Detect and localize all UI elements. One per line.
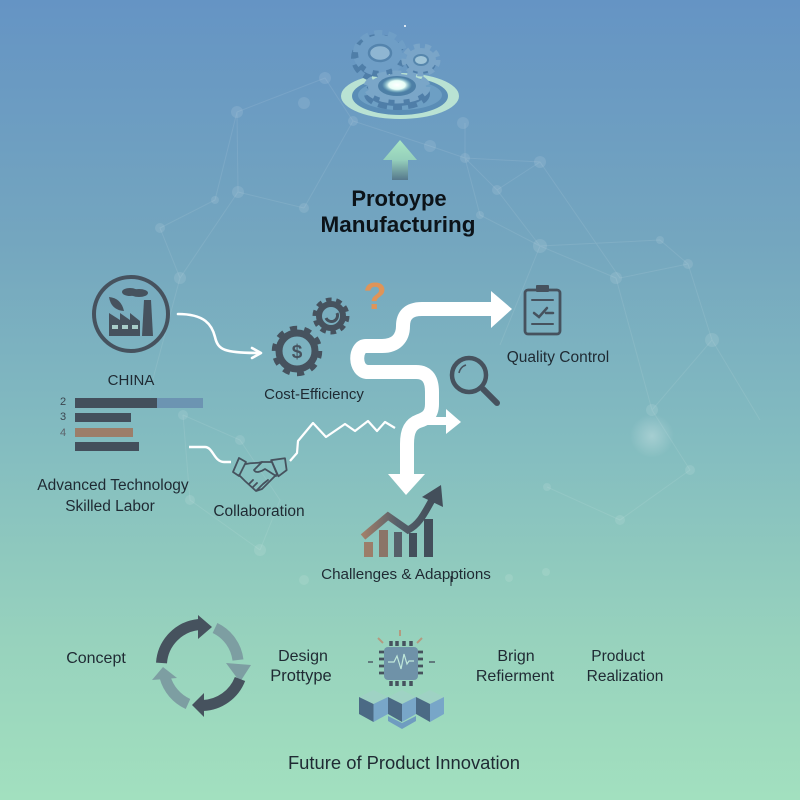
arrow: up: [383, 140, 417, 180]
bar chart: [60, 396, 203, 451]
title: Protoype: [351, 186, 447, 211]
text: advanced technology, skilled labor: Skilled Labor: [65, 498, 155, 515]
connector: bars to handshake: [189, 447, 231, 462]
icon: handshake: [233, 458, 287, 491]
arrow: factory to cost-efficiency: [178, 314, 261, 358]
icon: china factory: [94, 277, 168, 351]
icon: magnifier: [452, 358, 497, 403]
icon: dollar gear: $: [292, 342, 303, 363]
title: Manufacturing: [320, 212, 476, 237]
text: design prototype: Design: [278, 648, 328, 665]
text: design prototype: [270, 648, 332, 685]
main white flow arrows: [357, 291, 512, 495]
bar chart: 4: [60, 427, 66, 439]
icon: clipboard: [525, 285, 560, 334]
text: product realization: Realization: [587, 668, 663, 685]
title: [320, 186, 476, 237]
label: cost-efficiency: Cost-Efficiency: [264, 386, 364, 403]
icon: growth chart: [363, 485, 443, 557]
connector: handshake to flow: [290, 421, 395, 461]
text: product realization: [587, 648, 663, 685]
label: china: CHINA: [108, 372, 154, 389]
icon: small gear: [315, 300, 347, 332]
text: bring refinement: Refierment: [476, 668, 555, 685]
icon: cycle arrows: [152, 615, 251, 717]
label: challenges and adaptions: Challenges & Adapptions: [321, 566, 491, 583]
text: advanced technology, skilled labor: [37, 477, 189, 515]
footer title: Future of Product Innovation: [288, 752, 520, 773]
icon: microchip: [368, 630, 435, 686]
bar chart: 3: [60, 411, 66, 423]
text: bring refinement: [476, 648, 555, 685]
text: design prototype: Prottype: [270, 667, 332, 685]
icon: question mark: ?: [363, 276, 387, 318]
label: concept: Concept: [66, 650, 126, 667]
bar chart: 2: [60, 396, 66, 408]
icon: gears on platform: [341, 25, 459, 119]
icon: dollar gear: [274, 328, 320, 374]
label: quality control: Quality Control: [507, 349, 609, 366]
background network: [150, 72, 760, 585]
label: collaboration: Collaboration: [213, 503, 305, 520]
text: advanced technology, skilled labor: Advanced Technology: [37, 477, 189, 494]
icon: cubes: [359, 690, 444, 729]
text: bring refinement: Brign: [497, 648, 535, 665]
text: product realization: Product: [591, 648, 645, 665]
